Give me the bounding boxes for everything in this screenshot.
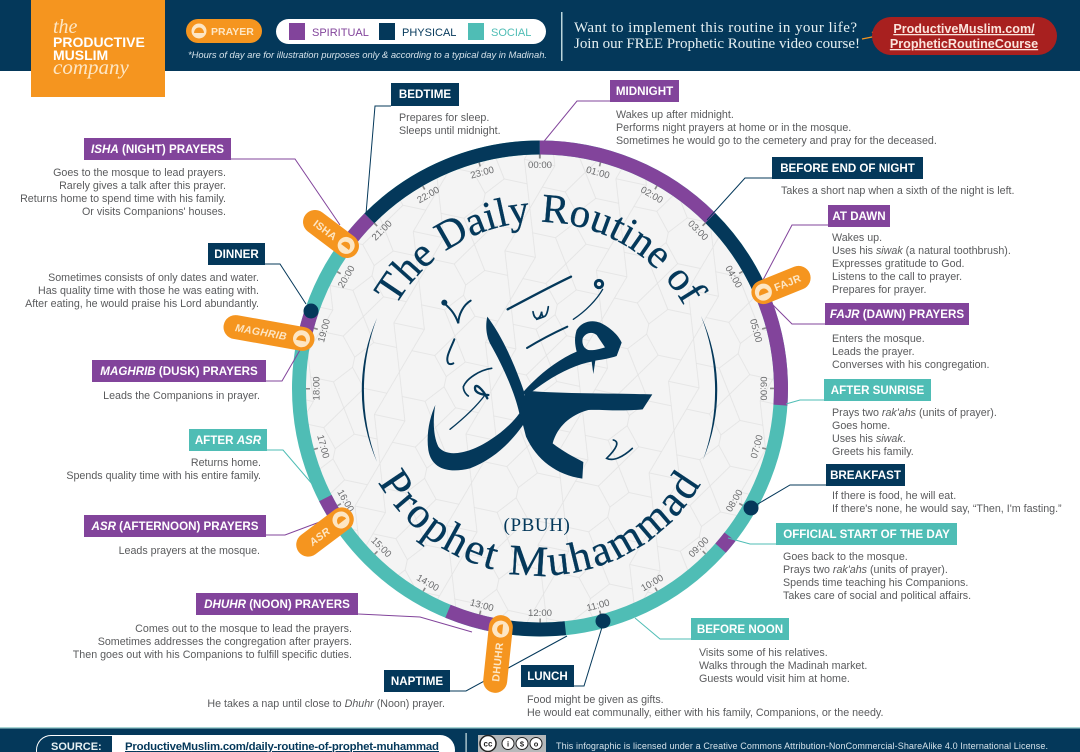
panel: at dawn: Listens to the call to prayer.	[832, 271, 962, 283]
footer bar	[0, 727, 1080, 752]
panel: before noon	[635, 618, 867, 685]
panel: at dawn: Uses his siwak (a natural toothbrush).	[832, 245, 1011, 257]
panel: at dawn: Wakes up.	[832, 232, 882, 244]
panel: midnight: Sometimes he would go to the cemetery and pray for the deceased.	[616, 135, 937, 147]
panel: dinner: DINNER	[214, 248, 259, 261]
panel: after sunrise: AFTER SUNRISE	[831, 384, 924, 397]
prayer pill: fajr	[748, 262, 814, 308]
clock face	[304, 152, 776, 624]
hour labels: 00:00	[528, 160, 552, 171]
prayer pill: fajr: FAJR	[773, 272, 803, 294]
panel: maghrib prayers	[92, 350, 300, 402]
activity dot: breakfast	[744, 500, 758, 516]
course link button: PropheticRoutineCourse	[890, 37, 1038, 51]
prayer pill: dhuhr: DHUHR	[490, 642, 506, 682]
header bar	[0, 0, 1080, 97]
panel: bedtime: BEDTIME	[399, 88, 451, 101]
panel: fajr prayers: FAJR (DAWN) PRAYERS	[830, 308, 964, 321]
creative commons badges: cc	[484, 740, 493, 748]
title: upper arc: The Daily Routine of	[373, 194, 709, 305]
panel: lunch	[521, 624, 883, 719]
panel: dhuhr prayers: Then goes out with his Companions to fulfill specific duties.	[73, 649, 352, 661]
course link button: ProductiveMuslim.com/	[893, 22, 1035, 36]
panel: after asr	[66, 429, 313, 485]
logo: MUSLIM	[53, 47, 108, 63]
panel: dhuhr prayers	[73, 593, 472, 661]
prayer pill: dhuhr	[482, 614, 514, 694]
hour labels: 13:00	[469, 597, 495, 614]
panel: after sunrise: Greets his family.	[832, 446, 914, 458]
panel: dinner: Has quality time with those he was eating with.	[38, 285, 259, 297]
hour labels: 03:00	[685, 218, 710, 243]
hour labels: 02:00	[638, 185, 665, 206]
hour labels: 11:00	[586, 598, 611, 614]
legend: prayer pill: PRAYER	[211, 26, 254, 38]
hour labels: 06:00	[758, 376, 768, 401]
panel: before end of night: Takes a short nap when a sixth of the night is left.	[781, 185, 1014, 197]
panel: before noon: Visits some of his relatives.	[699, 647, 828, 659]
hour labels: 05:00	[747, 318, 764, 344]
panel: isha prayers: Returns home to spend time with his family.	[20, 193, 226, 205]
source pill	[36, 735, 455, 752]
hour labels: 08:00	[724, 488, 746, 514]
course invitation	[574, 20, 860, 52]
panel: official start of the day: OFFICIAL START OF THE DAY	[783, 528, 950, 541]
hour labels: 19:00	[316, 318, 333, 344]
panel: dhuhr prayers: Sometimes addresses the congregation after prayers.	[98, 636, 352, 648]
panel: before end of night	[707, 157, 1014, 220]
panel: official start of the day: Goes back to the mosque.	[783, 551, 908, 563]
creative commons badges: $	[520, 740, 525, 748]
hour labels: 23:00	[469, 165, 495, 182]
clock ring	[299, 148, 781, 630]
course invitation: Join our FREE Prophetic Routine video course!	[574, 36, 860, 52]
panel: naptime: He takes a nap until close to Dhuhr (Noon) prayer.	[207, 698, 445, 710]
panel: after sunrise: Prays two rak'ahs (units of prayer).	[832, 407, 997, 419]
logo	[31, 0, 165, 97]
prayer pill: asr: ASR	[306, 525, 333, 549]
panel: isha prayers: Rarely gives a talk after this prayer.	[59, 180, 226, 192]
panel: naptime	[207, 636, 567, 710]
prayer pill: isha	[298, 205, 364, 263]
panel: before noon: Walks through the Madinah market.	[699, 660, 867, 672]
creative commons badges	[478, 735, 546, 752]
panel: dinner	[25, 243, 306, 310]
panel: lunch: Food might be given as gifts.	[527, 694, 664, 706]
activity dot: lunch	[596, 614, 610, 628]
legend: categories: SOCIAL	[491, 27, 531, 39]
panel: dhuhr prayers: DHUHR (NOON) PRAYERS	[204, 598, 350, 611]
panel: official start of the day	[728, 523, 971, 602]
title: honorific: (PBUH)	[504, 515, 570, 536]
prayer pill: asr	[291, 503, 359, 561]
panel: isha prayers: Or visits Companions' houses.	[82, 206, 226, 218]
panel: after sunrise: Uses his siwak.	[832, 433, 906, 445]
course invitation: Want to implement this routine in your life?	[574, 20, 857, 36]
panel: at dawn: Prepares for prayer.	[832, 284, 926, 296]
panel: breakfast: BREAKFAST	[830, 469, 901, 482]
panel: fajr prayers: Enters the mosque.	[832, 333, 925, 345]
panel: fajr prayers: Converses with his congregation.	[832, 359, 989, 371]
panel: after sunrise: Goes home.	[832, 420, 890, 432]
panel: bedtime: Sleeps until midnight.	[399, 125, 501, 137]
logo: PRODUCTIVE	[53, 34, 145, 50]
logo: the	[53, 16, 78, 38]
divider	[561, 12, 562, 61]
panel: asr prayers	[84, 515, 325, 557]
legend: categories	[276, 19, 546, 44]
legend: categories: SPIRITUAL	[312, 27, 369, 39]
divider	[466, 733, 467, 752]
hour labels	[312, 160, 768, 619]
legend note: *Hours of day are for illustration purposes only & according to a typical day in Madinah.	[188, 49, 547, 60]
panel: midnight: Performs night prayers at home or in the mosque.	[616, 122, 851, 134]
hour labels: 14:00	[414, 573, 441, 594]
hour labels: 09:00	[687, 535, 711, 560]
logo: company	[53, 55, 129, 79]
panel: after asr: AFTER ASR	[195, 434, 262, 447]
hour labels: 15:00	[369, 535, 393, 560]
panel: breakfast: If there's none, he would say, “Then, I'm fasting.”	[832, 503, 1062, 515]
panel: asr prayers: ASR (AFTERNOON) PRAYERS	[90, 520, 259, 533]
panel: official start of the day: Spends time teaching his Companions.	[783, 577, 968, 589]
panel: lunch: LUNCH	[527, 670, 568, 683]
panel: after asr: Spends quality time with his entire family.	[66, 470, 261, 482]
creative commons badges: o	[534, 740, 539, 748]
panel: before end of night: BEFORE END OF NIGHT	[780, 162, 915, 175]
panel: dinner: After eating, he would praise his Lord abundantly.	[25, 298, 259, 310]
hour labels: 17:00	[314, 434, 331, 460]
panel: official start of the day: Prays two rak'ahs (units of prayer).	[783, 564, 948, 576]
hour labels: 16:00	[334, 488, 356, 514]
prayer pill: maghrib: MAGHRIB	[234, 322, 288, 343]
panel: isha prayers: ISHA (NIGHT) PRAYERS	[91, 143, 224, 156]
panel: isha prayers: Goes to the mosque to lead prayers.	[53, 167, 226, 179]
panel: fajr prayers: Leads the prayer.	[832, 346, 915, 358]
arrow to course link	[862, 32, 878, 41]
hour labels: 07:00	[749, 434, 766, 460]
panel: after asr: Returns home.	[191, 457, 261, 469]
panel: lunch: He would eat communally, either with his family, Companions, or the needy.	[527, 707, 883, 719]
legend: prayer pill	[186, 19, 262, 43]
panel: midnight	[541, 80, 937, 147]
panel: asr prayers: Leads prayers at the mosque.	[119, 545, 260, 557]
hour labels: 22:00	[415, 185, 442, 206]
creative commons badges: i	[507, 740, 509, 748]
hour labels: 10:00	[639, 573, 666, 594]
panel: dinner: Sometimes consists of only dates and water.	[48, 272, 259, 284]
hour labels: 01:00	[585, 165, 611, 182]
panel: isha prayers	[20, 138, 340, 225]
course link button	[872, 17, 1057, 55]
panel: at dawn	[763, 205, 1011, 296]
decorative side arcs	[362, 316, 717, 462]
panel: after sunrise	[786, 379, 997, 458]
panel: fajr prayers	[773, 303, 989, 371]
prayer pill: isha: ISHA	[311, 218, 339, 243]
title: lower arc: Prophet Muhammad	[378, 467, 701, 576]
hour labels: 20:00	[336, 264, 358, 290]
hour labels: 21:00	[370, 218, 395, 243]
hour labels: 04:00	[722, 264, 744, 290]
panel: at dawn: Expresses gratitude to God.	[832, 258, 964, 270]
panel: before noon: BEFORE NOON	[697, 623, 783, 636]
panel: midnight: MIDNIGHT	[616, 85, 673, 98]
panel: official start of the day: Takes care of social and political affairs.	[783, 590, 971, 602]
prayer pill: maghrib	[222, 313, 316, 353]
panel: dhuhr prayers: Comes out to the mosque to lead the prayers.	[135, 623, 352, 635]
panel: bedtime: Prepares for sleep.	[399, 112, 489, 124]
hour labels: 18:00	[312, 376, 322, 401]
hour labels: 12:00	[528, 608, 552, 619]
panel: maghrib prayers: Leads the Companions in prayer.	[103, 390, 260, 402]
panel: naptime: NAPTIME	[391, 675, 443, 688]
panel: before noon: Guests would visit him at home.	[699, 673, 850, 685]
panel: bedtime	[366, 83, 501, 214]
panel: maghrib prayers: MAGHRIB (DUSK) PRAYERS	[100, 365, 258, 378]
legend: categories: PHYSICAL	[402, 27, 456, 39]
calligraphy: Muhammad	[428, 277, 652, 479]
panel: at dawn: AT DAWN	[832, 210, 886, 223]
panel: breakfast: If there is food, he will eat.	[832, 490, 956, 502]
panel: breakfast	[751, 464, 1062, 515]
license text: This infographic is licensed under a Creative Commons Attribution-NonCommercial-ShareAlike 4.0 International License.	[556, 741, 1048, 751]
panel: midnight: Wakes up after midnight.	[616, 109, 734, 121]
activity dot: dinner	[304, 304, 318, 318]
